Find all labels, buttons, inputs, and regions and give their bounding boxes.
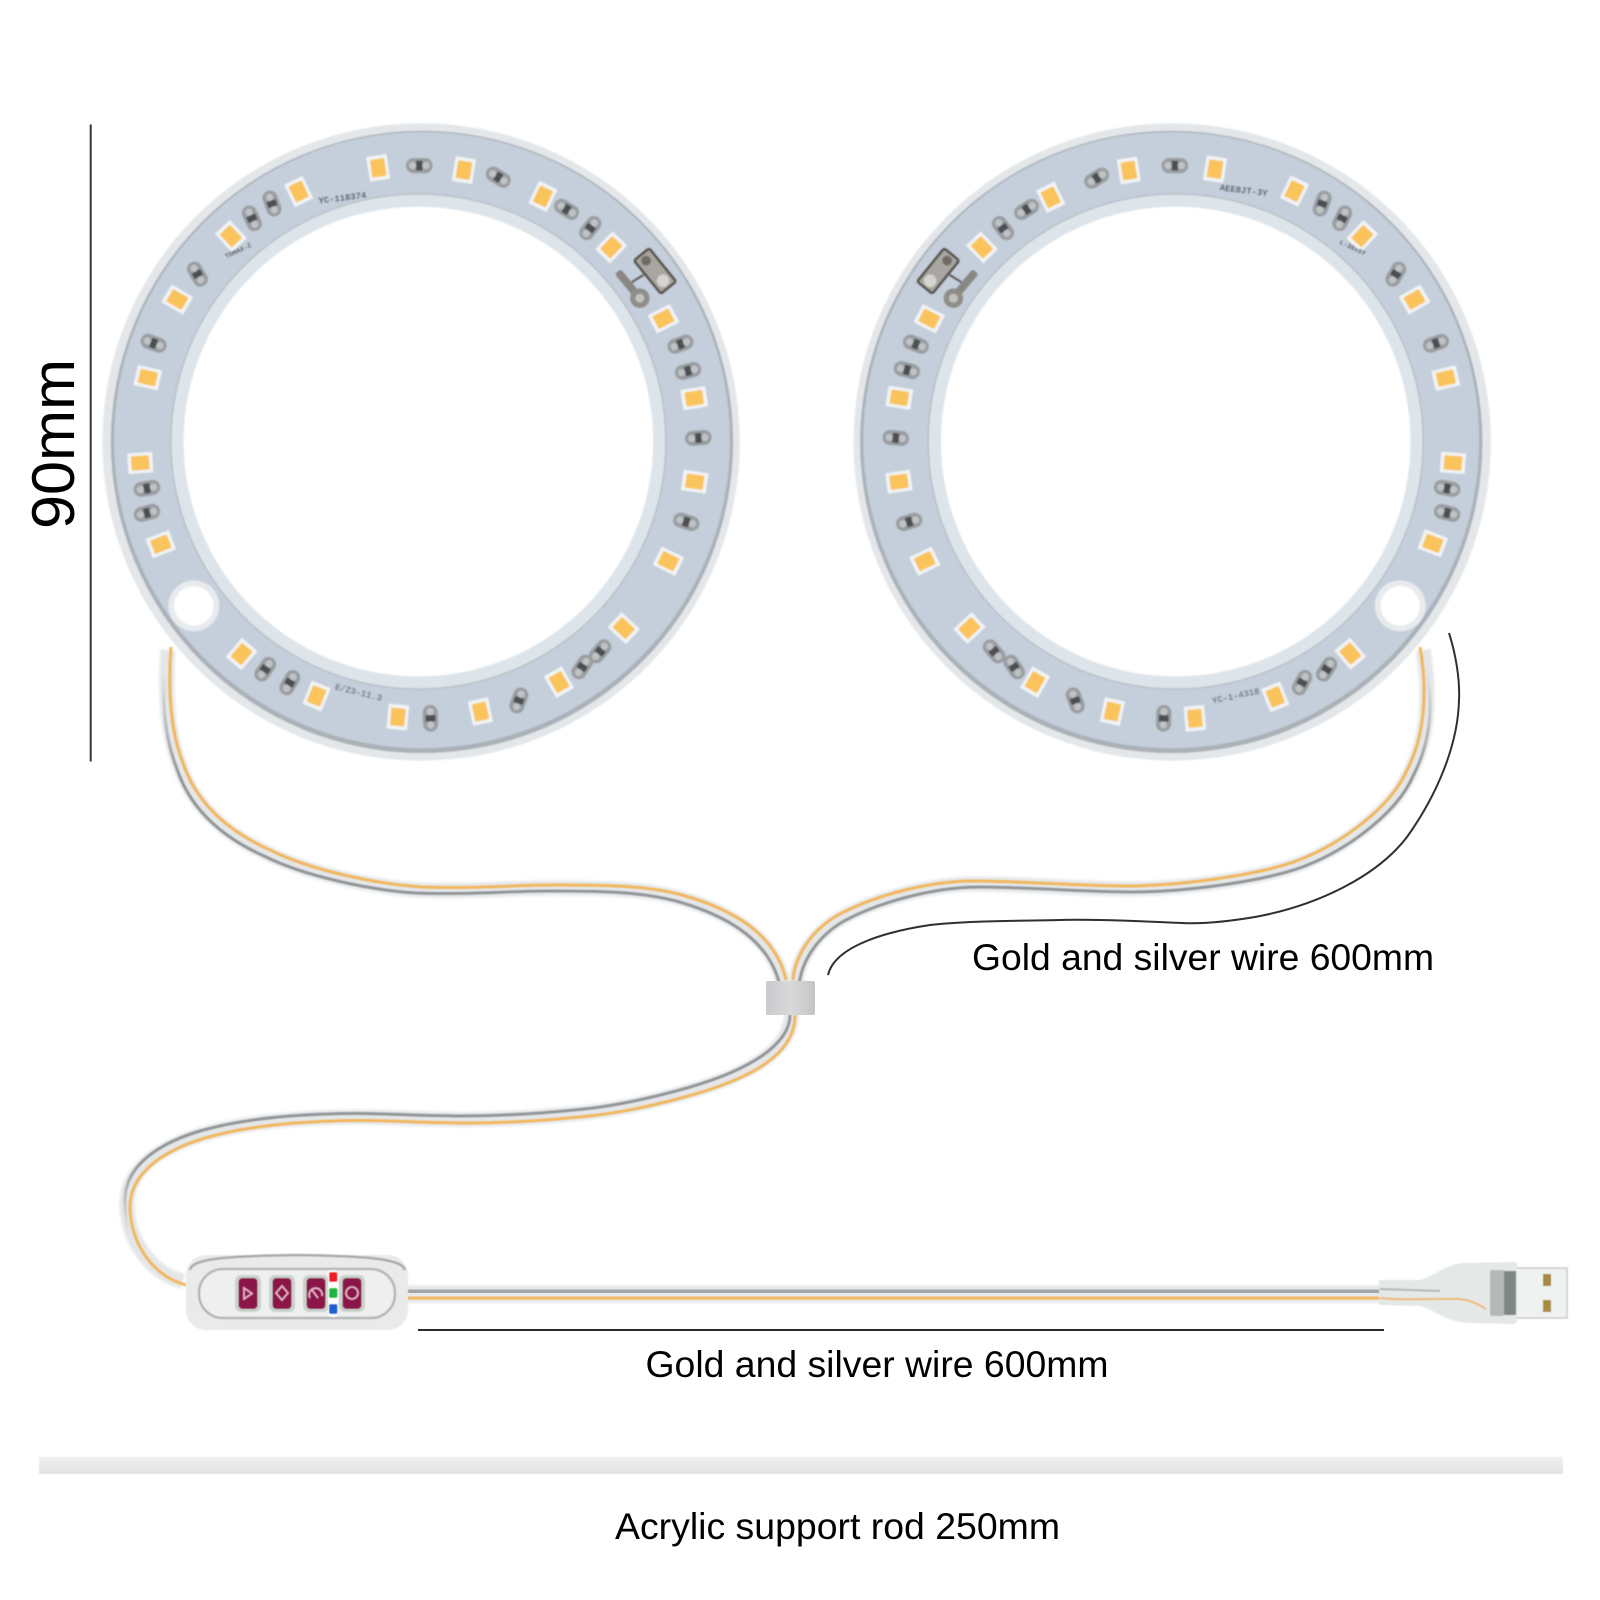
right LED ring	[853, 123, 1491, 761]
label: lower wire length: Gold and silver wire 600mm	[646, 1344, 1108, 1385]
mounting hole	[168, 580, 219, 631]
silkscreen marks: YC-118374	[318, 191, 368, 207]
silkscreen marks	[224, 191, 383, 704]
label: acrylic rod: Acrylic support rod 250mm	[615, 1506, 1060, 1547]
cable: splitter to controller	[125, 1012, 795, 1285]
measurement wire: black curve	[828, 633, 1459, 975]
label: 90mm: 90mm	[20, 359, 87, 529]
solder pads	[132, 158, 712, 732]
button 3	[303, 1275, 329, 1312]
cable clamp	[766, 981, 815, 1015]
silkscreen marks: E/Z3-11.3	[334, 682, 383, 704]
LEDs	[885, 155, 1466, 732]
dimension line: ring height	[90, 124, 92, 762]
LED indicators	[328, 1270, 338, 1317]
button 1	[235, 1275, 261, 1312]
cable: controller to USB	[405, 1285, 1385, 1303]
inline controller	[186, 1255, 408, 1330]
driver component	[917, 248, 979, 308]
measurement line: controller cable	[418, 1329, 1384, 1331]
mounting hole	[1375, 580, 1426, 631]
USB contacts	[1543, 1274, 1551, 1312]
USB plug	[1379, 1262, 1567, 1324]
driver component	[614, 248, 676, 308]
silkscreen marks: L-30x0Y	[1338, 239, 1367, 258]
left LED ring	[102, 123, 740, 761]
cable: left ring to splitter	[164, 647, 786, 986]
silkscreen marks: TDMAX-Z	[224, 242, 253, 261]
silkscreen marks: AEE8JT-3Y	[1219, 183, 1269, 199]
acrylic support rod	[39, 1457, 1563, 1474]
USB metal shell	[1515, 1268, 1567, 1318]
button 4	[339, 1275, 365, 1312]
solder pads	[882, 158, 1462, 732]
USB strain relief	[1379, 1262, 1517, 1324]
LEDs	[127, 154, 709, 730]
silkscreen marks: YC-1-4318	[1211, 687, 1260, 707]
label: upper wire length: Gold and silver wire 600mm	[972, 937, 1434, 978]
silkscreen marks	[1211, 183, 1367, 707]
button 2	[269, 1275, 295, 1312]
cable: right ring to splitter	[793, 647, 1430, 986]
